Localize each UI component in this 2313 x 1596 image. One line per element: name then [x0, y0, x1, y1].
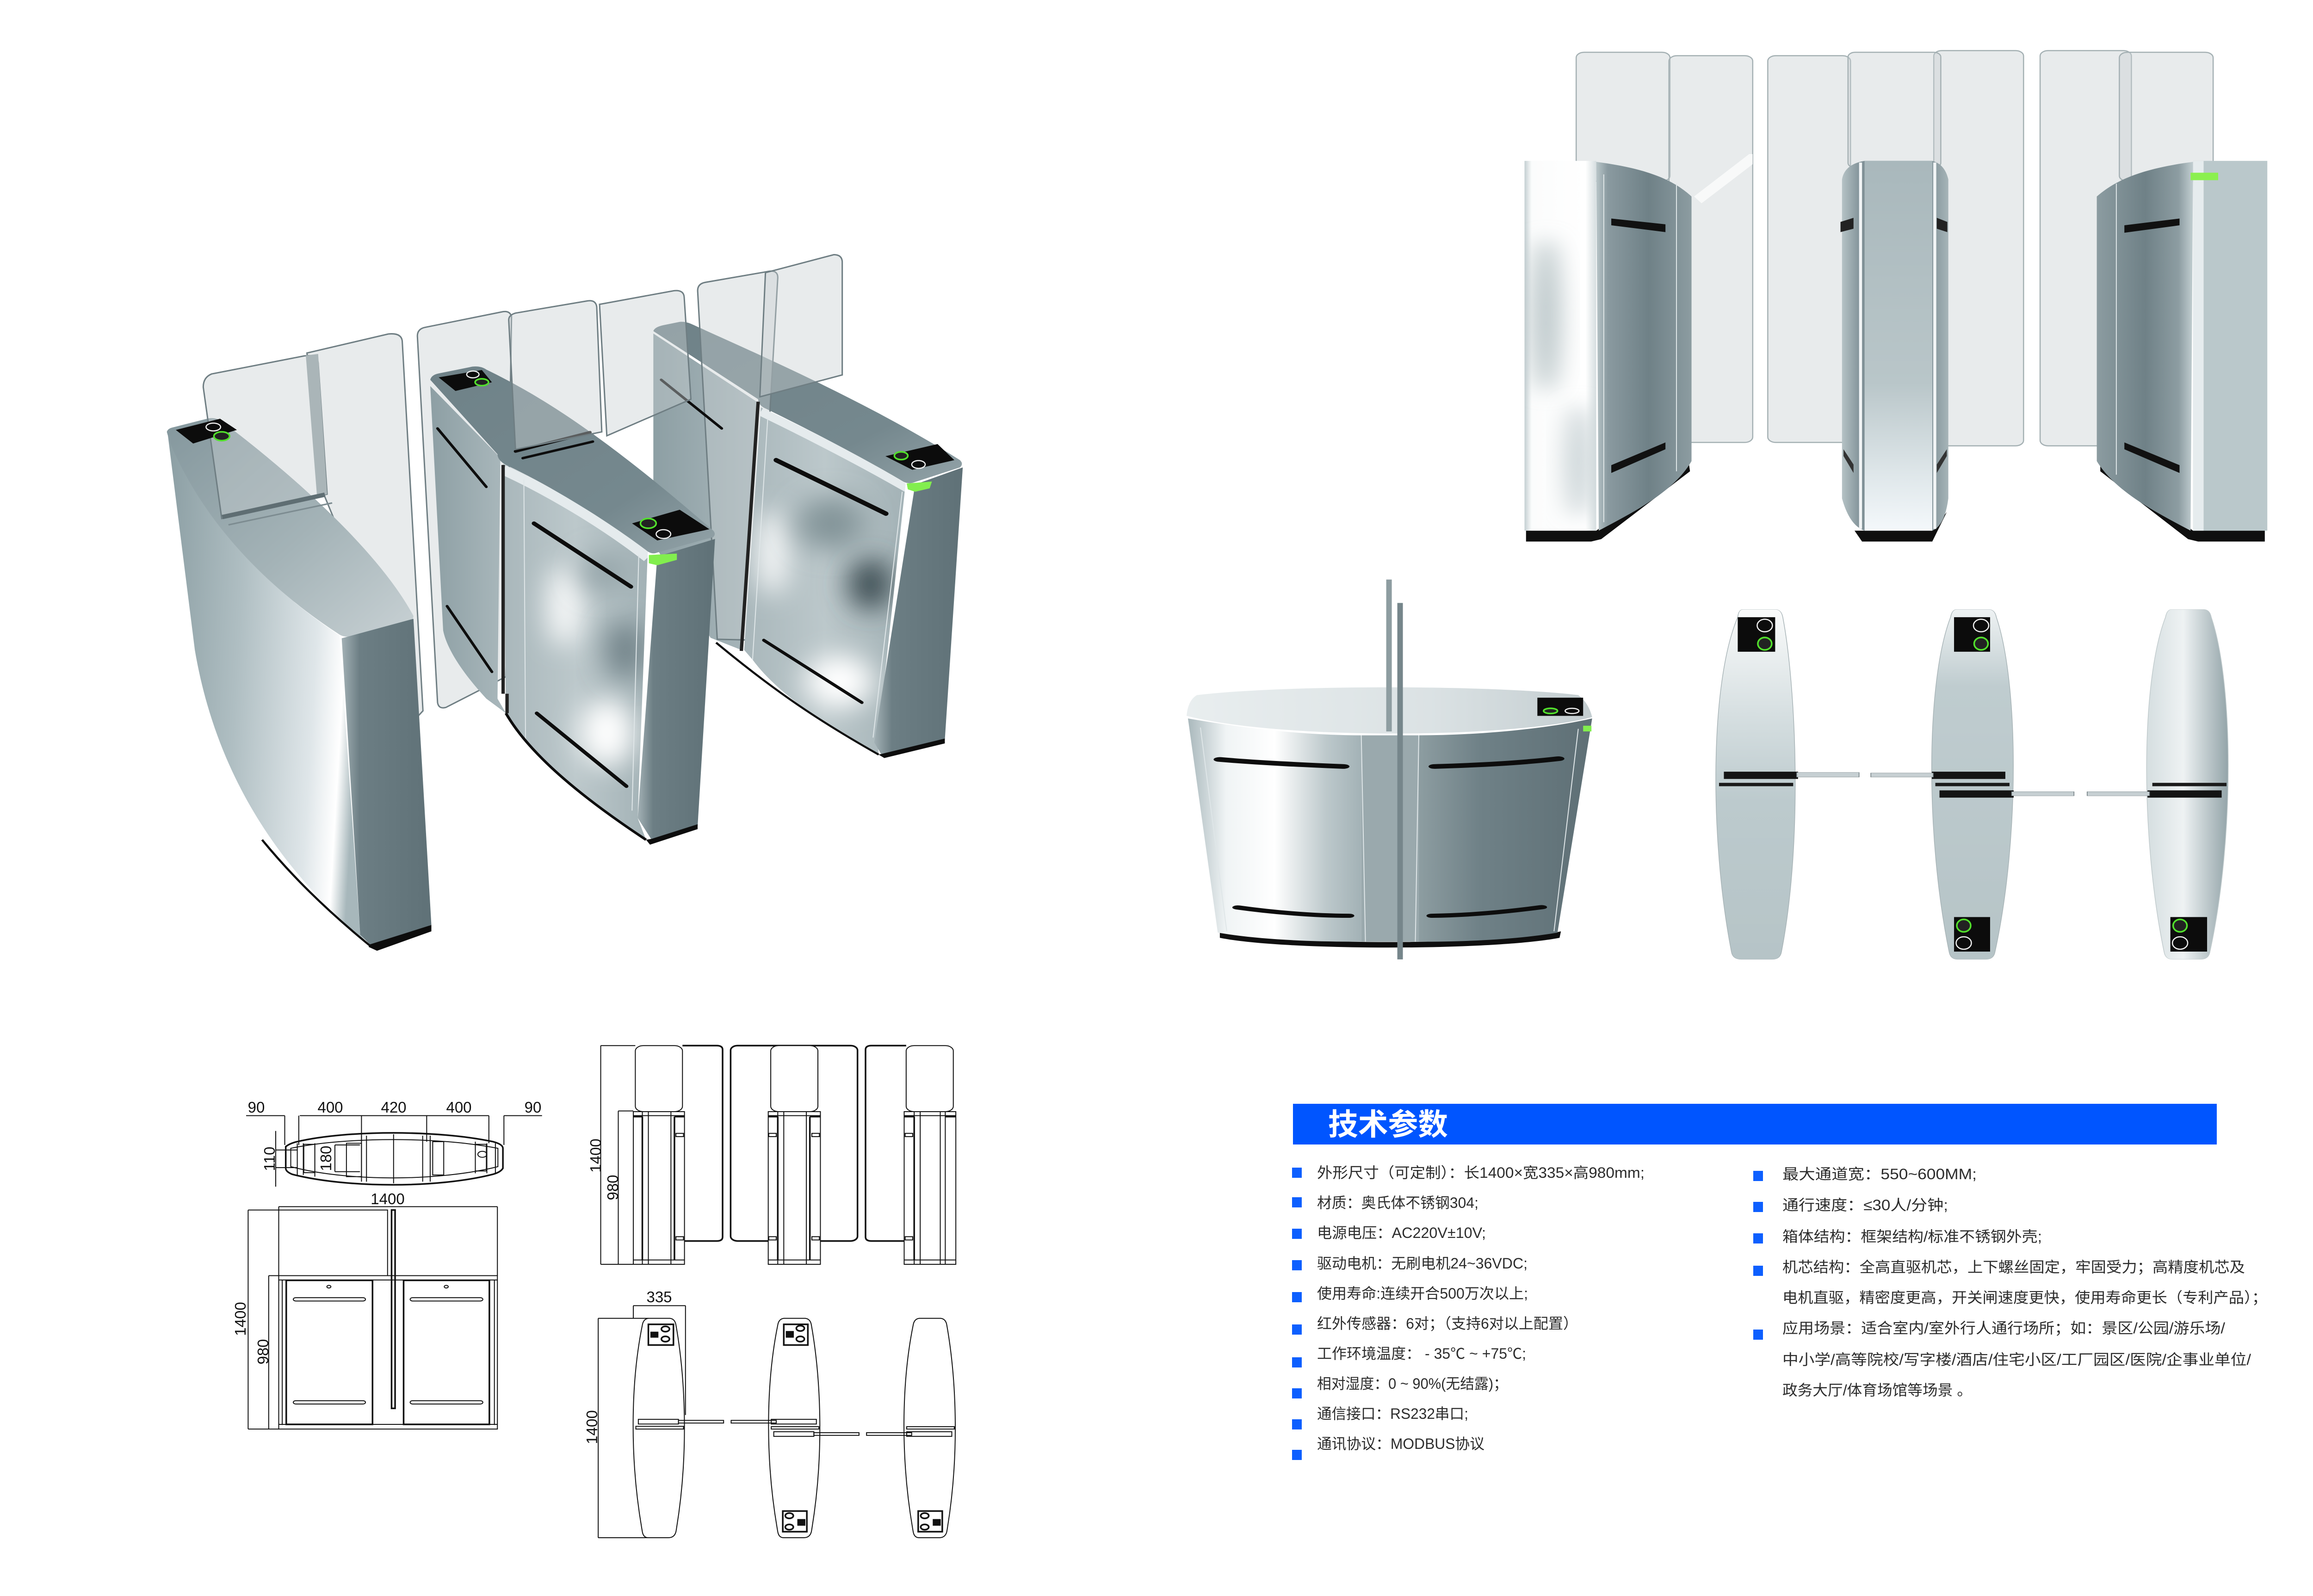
heading bar: technical parameters: 技术参数: [1328, 1107, 1448, 1141]
plan view unit 3: [2087, 609, 2228, 959]
middle unit: [430, 301, 715, 845]
icon: control panel: [632, 510, 710, 540]
left elevation unit: [1525, 52, 1753, 542]
icon: green indicator: [1583, 726, 1591, 731]
parameter list: right column: 电机直驱，精密度更高，开关闸速度更快，使用寿命更长（专利产品）；: [1782, 1289, 2267, 1306]
dimension labels: 110: [261, 1147, 278, 1171]
perspective render: three gate units: [167, 255, 963, 951]
right elevation unit: [2040, 50, 2267, 542]
parameter list: right column: 通行速度：≤30人/分钟;: [1782, 1197, 1948, 1213]
heading bar: technical parameters: [1293, 1104, 2217, 1144]
icon: control panel: [1537, 698, 1583, 716]
parameter list: left column: 通信接口：RS232串口;: [1317, 1405, 1468, 1422]
dimension labels: 1400: [587, 1138, 604, 1173]
dimension labels: 980: [254, 1339, 272, 1365]
parameter list: left column: 驱动电机：无刷电机24~36VDC;: [1317, 1255, 1528, 1272]
icon: green indicator: [649, 554, 677, 565]
dimension labels: 1400: [232, 1302, 249, 1336]
back right unit: [653, 255, 963, 758]
dimension labels: 400: [446, 1099, 472, 1116]
icon: control panel: [176, 419, 237, 444]
glass panels of the middle unit: [417, 291, 691, 708]
dimension labels: 1400: [371, 1190, 405, 1207]
side elevation drawing 3: [866, 1045, 956, 1264]
parameter list: left column: [1292, 1164, 1645, 1460]
middle elevation unit: [1768, 50, 2023, 542]
plan outline drawing 3: [866, 1318, 955, 1538]
dimension labels: 335: [646, 1288, 672, 1305]
front left unit: [167, 354, 432, 951]
dimension labels: 1400: [583, 1410, 600, 1444]
parameter list: left column: 通讯协议：MODBUS协议: [1317, 1435, 1484, 1452]
icon: green indicator: [907, 482, 932, 492]
front render and plan renders: [1187, 580, 2228, 959]
plan outline drawing 2: [731, 1318, 859, 1538]
side elevation drawing 2: [730, 1045, 858, 1264]
parameter list: left column: 使用寿命:连续开合500万次以上;: [1317, 1285, 1528, 1302]
icon: green indicator: [2190, 173, 2218, 180]
glass panel behind the left unit: [307, 334, 423, 718]
icon: control panel rear: [439, 370, 492, 391]
parameter list: left column: 红外传感器：6对；（支持6对以上配置）: [1317, 1315, 1578, 1332]
dimension labels: 90: [525, 1099, 541, 1116]
dimension labels: 980: [604, 1175, 621, 1200]
parameter list: right column: 箱体结构：框架结构/标准不锈钢外壳;: [1782, 1228, 2042, 1245]
plan view unit 1: [1716, 609, 1859, 959]
parameter list: right column: 政务大厅/体育场馆等场景 。: [1782, 1382, 1972, 1398]
dimension labels: 420: [381, 1099, 407, 1116]
parameter list: right column: 最大通道宽：550~600MM;: [1782, 1166, 1977, 1182]
parameter list: left column: 材质：奥氏体不锈钢304;: [1317, 1194, 1478, 1211]
icon: control panel: [885, 444, 954, 470]
parameter list: left column: 工作环境温度： - 35℃ ~ +75℃;: [1317, 1345, 1526, 1362]
plan view unit 2: [1871, 609, 2074, 959]
parameter list: left column: 相对湿度：0 ~ 90%(无结露)；: [1317, 1375, 1508, 1392]
glass leaf over the top surface: [203, 354, 327, 519]
dimension labels: 180: [317, 1145, 334, 1171]
dimension labels: 90: [248, 1099, 265, 1116]
front elevation drawing: [248, 1206, 497, 1429]
parameter list: right column: 机芯结构：全高直驱机芯，上下螺丝固定，牢固受力；高精度机芯及: [1782, 1259, 2245, 1275]
parameter list: left column: 外形尺寸（可定制）：长1400×宽335×高980mm;: [1317, 1164, 1645, 1181]
dimension labels: 400: [317, 1099, 343, 1116]
parameter list: right column: 中小学/高等院校/写字楼/酒店/住宅小区/工厂园区/医院/企事业单位/: [1782, 1351, 2251, 1368]
side elevation drawing 1: [601, 1045, 723, 1264]
parameter list: right column: [1753, 1166, 2267, 1398]
dimension labels: [232, 1099, 672, 1444]
plan section drawing: [246, 1116, 542, 1187]
parameter list: left column: 电源电压：AC220V±10V;: [1317, 1225, 1486, 1241]
elevation renders: three gate units: [1525, 50, 2267, 542]
front view unit: [1187, 580, 1592, 959]
technical drawings: [246, 1045, 956, 1538]
plan outline drawing 1: [598, 1305, 724, 1538]
parameter list: right column: 应用场景：适合室内/室外行人通行场所；如：景区/公园/游乐场/: [1782, 1320, 2225, 1336]
